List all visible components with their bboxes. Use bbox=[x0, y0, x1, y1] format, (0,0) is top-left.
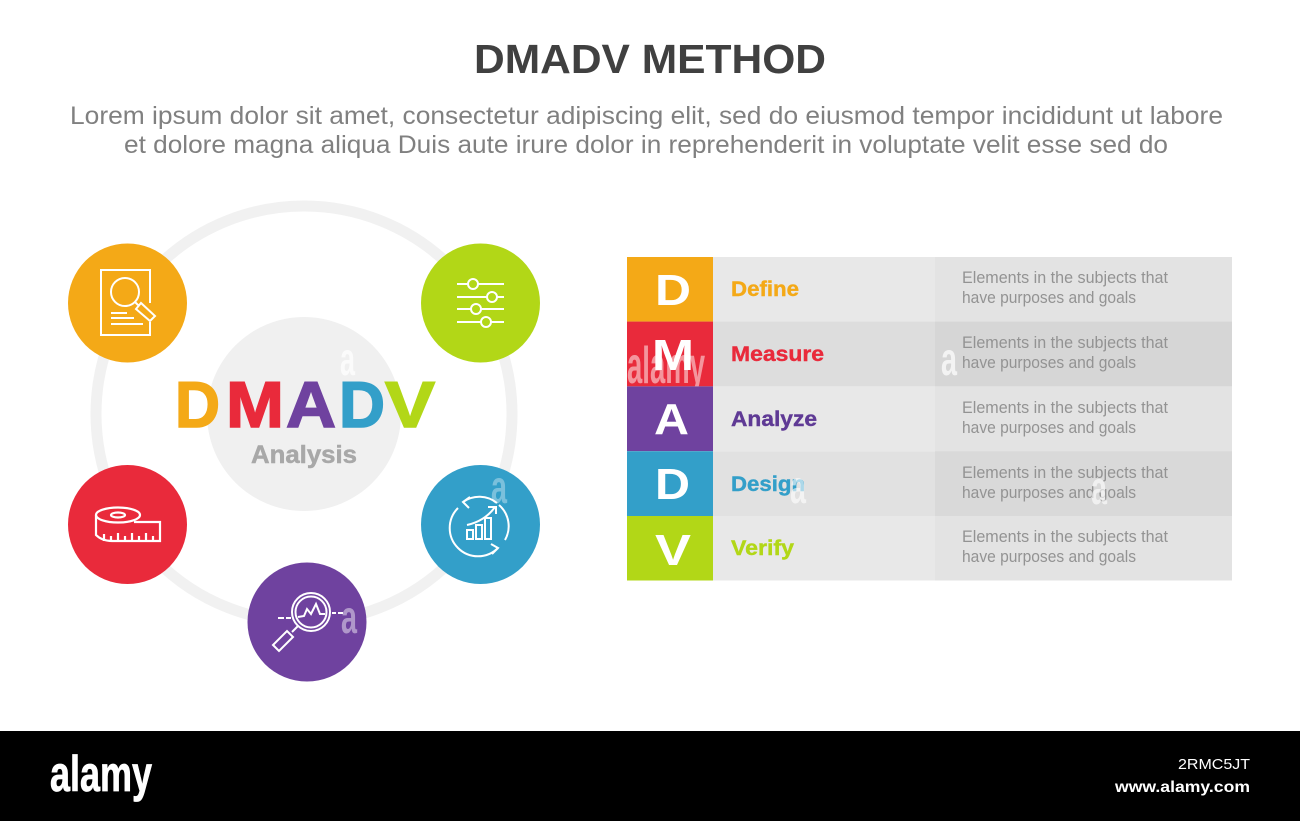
table: DMADV steps bbox=[627, 257, 1232, 580]
watermark glyph: a bbox=[491, 461, 507, 513]
row: define bbox=[627, 257, 1232, 322]
row: analyze bbox=[627, 386, 1232, 451]
centre label: DMADV Analysis: Analysis bbox=[251, 441, 357, 469]
row: design: Design bbox=[731, 473, 805, 496]
row: define: Define bbox=[731, 278, 799, 301]
centre label: DMADV Analysis bbox=[175, 368, 435, 469]
centre label: DMADV Analysis: M bbox=[226, 368, 284, 441]
centre label: DMADV Analysis: D bbox=[175, 368, 220, 441]
outer ring bbox=[96, 206, 512, 622]
row: verify: Verify bbox=[731, 537, 794, 560]
row: define: Elements in the subjects that bbox=[962, 268, 1168, 287]
image id: 2RMC5JT bbox=[1178, 756, 1250, 773]
row: verify: have purposes and goals bbox=[962, 547, 1136, 566]
row: measure: a bbox=[941, 333, 957, 385]
row: analyze: A bbox=[654, 395, 689, 444]
row: design: a bbox=[1091, 462, 1107, 514]
row: measure: Elements in the subjects that bbox=[962, 333, 1168, 352]
icon circle: define (document with magnifier) bbox=[68, 244, 187, 362]
row: define: D bbox=[655, 266, 691, 315]
title: DMADV METHOD bbox=[474, 36, 826, 82]
centre label: DMADV Analysis: V bbox=[385, 368, 435, 441]
row: design: Elements in the subjects that bbox=[962, 463, 1168, 482]
row: verify: Elements in the subjects that bbox=[962, 527, 1168, 546]
centre label: DMADV Analysis: D bbox=[339, 368, 385, 441]
row: verify bbox=[627, 516, 1232, 580]
row: design: a bbox=[790, 461, 806, 513]
row: define: have purposes and goals bbox=[962, 288, 1136, 307]
row: analyze: have purposes and goals bbox=[962, 418, 1136, 437]
row: analyze: Elements in the subjects that bbox=[962, 398, 1168, 417]
icon circle: analyze (magnifier with pulse) bbox=[248, 562, 366, 682]
row: measure: have purposes and goals bbox=[962, 353, 1136, 372]
footer bar bbox=[0, 731, 1300, 821]
row: verify: V bbox=[655, 526, 692, 575]
intro paragraph bbox=[70, 102, 1223, 159]
row: measure: M bbox=[652, 331, 694, 380]
watermark glyph: a bbox=[341, 591, 357, 643]
row: measure bbox=[627, 322, 1232, 395]
row: analyze: Analyze bbox=[731, 408, 817, 431]
site url: www.alamy.com bbox=[1114, 779, 1250, 796]
watermark glyphs: alamy bbox=[627, 337, 705, 395]
icon circle: design (cycle with rising bars) bbox=[421, 461, 540, 584]
intro paragraph: Lorem ipsum dolor sit amet, consectetur adipiscing elit, sed do eiusmod tempor incididunt ut labore bbox=[70, 102, 1223, 130]
row: design: have purposes and goals bbox=[962, 483, 1136, 502]
centre label: DMADV Analysis: A bbox=[286, 368, 336, 441]
footer logo: alamy bbox=[50, 746, 152, 802]
icon circle: verify (sliders) bbox=[421, 244, 540, 362]
row: measure: Measure bbox=[731, 343, 824, 366]
centre circle bbox=[207, 317, 401, 511]
row: design bbox=[627, 451, 1232, 516]
icon circle: measure (tape measure) bbox=[68, 465, 187, 584]
intro paragraph: et dolore magna aliqua Duis aute irure dolor in reprehenderit in voluptate velit esse sed do bbox=[124, 131, 1168, 159]
watermark glyph on centre circle: a bbox=[340, 333, 355, 385]
row: design: D bbox=[655, 460, 690, 509]
